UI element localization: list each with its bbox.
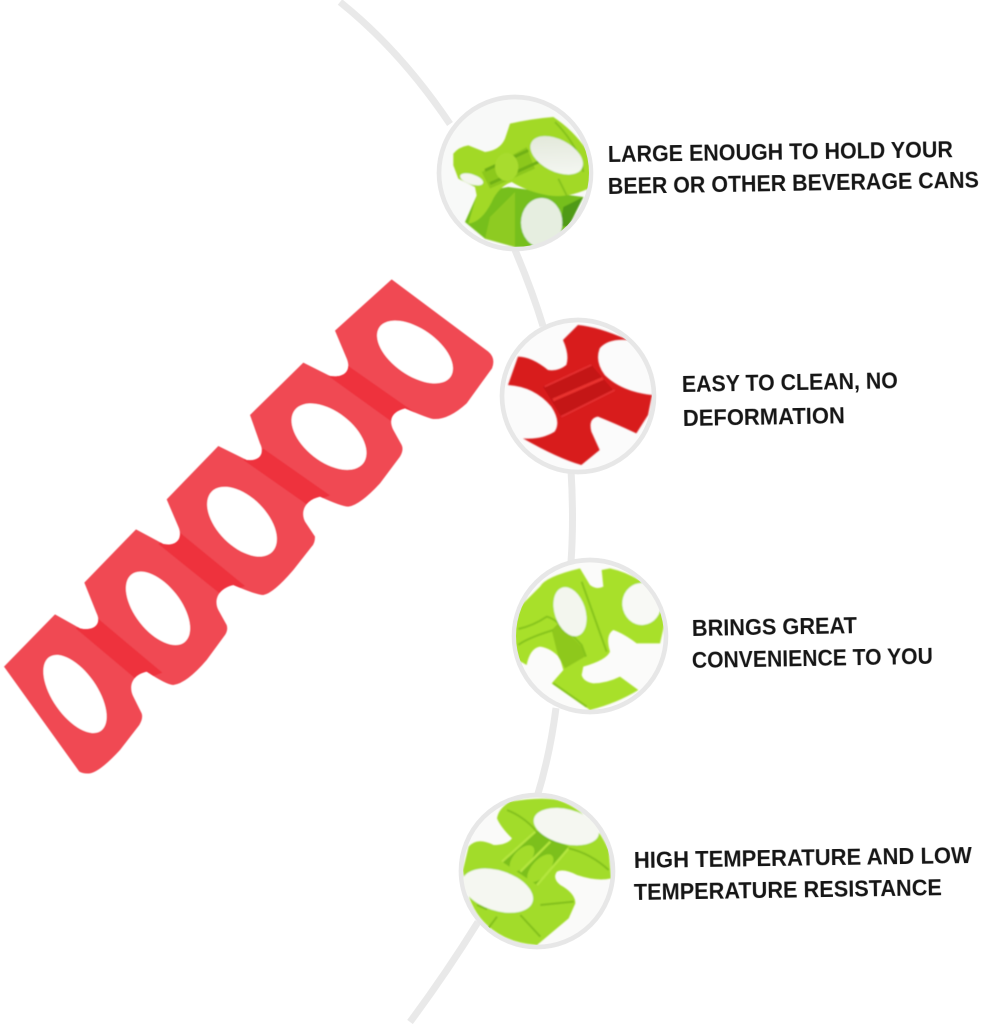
fold bands [76, 366, 415, 682]
feature 3: green detail circle [514, 560, 666, 712]
feature 1 text [608, 136, 979, 199]
feature 1: green detail circle [439, 97, 592, 249]
feature 4 text: HIGH TEMPERATURE AND LOW [634, 842, 972, 873]
feature 3 text [692, 612, 933, 673]
feature 4 text: TEMPERATURE RESISTANCE [634, 874, 942, 905]
rack holes [31, 308, 464, 744]
product: red can rack [4, 279, 493, 773]
feature 2 text: DEFORMATION [683, 402, 845, 431]
connector curve [340, 2, 572, 1022]
feature 4: green detail circle [457, 795, 613, 947]
feature 1 text: LARGE ENOUGH TO HOLD YOUR [608, 136, 953, 167]
feature 3 text: BRINGS GREAT [692, 612, 857, 641]
feature 2: red detail circle [502, 320, 654, 472]
feature 4 text [634, 842, 972, 905]
feature 2 text [682, 367, 898, 431]
feature 3 text: CONVENIENCE TO YOU [692, 643, 933, 673]
feature 2 text: EASY TO CLEAN, NO [682, 367, 898, 397]
